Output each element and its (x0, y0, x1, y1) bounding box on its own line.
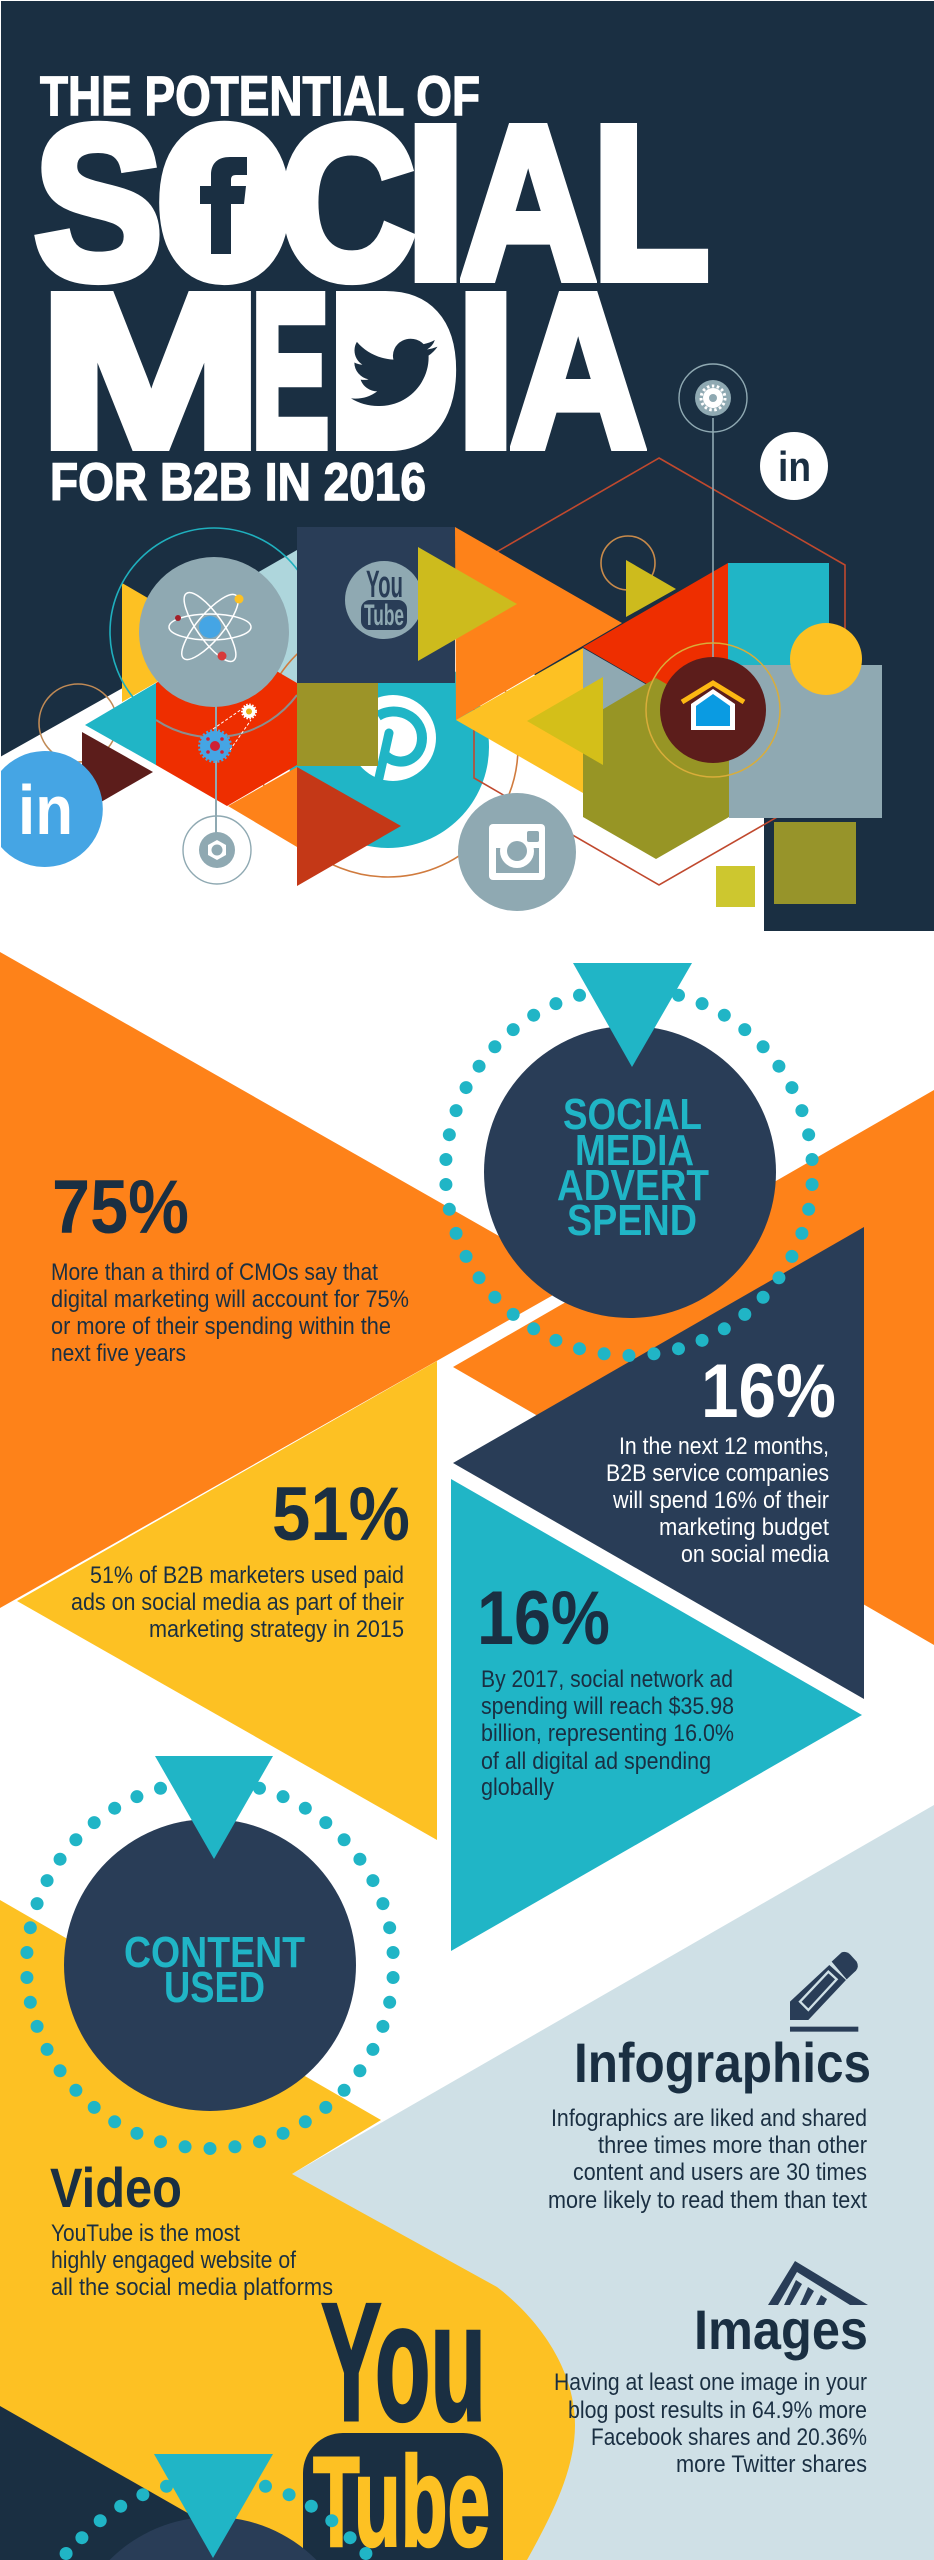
stat: 51%: ads on social media as part of their (71, 1589, 404, 1616)
stat: 51%: 51% (272, 1472, 410, 1557)
lime square (716, 866, 755, 907)
stat: 51% (71, 1472, 410, 1643)
badge: social media advert spend: MEDIA (575, 1126, 694, 1175)
title: social media: S (34, 82, 162, 324)
header dark background (1, 1, 934, 931)
icon: youtube badge (345, 561, 423, 639)
gray rectangle (729, 665, 882, 818)
text block: video (50, 2156, 333, 2301)
navy square (297, 527, 455, 683)
stat: 16% navy panel: on social media (681, 1541, 830, 1568)
text block: images: Facebook shares and 20.36% (591, 2424, 867, 2451)
stat: 51%: 51% of B2B marketers used paid (90, 1562, 404, 1589)
stat: 16% teal panel: billion, representing 16.0% (481, 1720, 734, 1747)
text block: images: Images (694, 2298, 868, 2361)
stat: 16% navy panel: marketing budget (659, 1514, 829, 1541)
text block: images: Having at least one image in your (554, 2369, 867, 2396)
teal left triangle (85, 683, 156, 765)
badge: content used (26, 1756, 394, 2148)
olive square (297, 683, 378, 766)
icon: youtube badge: You (366, 564, 403, 606)
stat: 75%: More than a third of CMOs say that (51, 1259, 378, 1286)
badge: content used: CONTENT (124, 1928, 305, 1977)
logo: large youtube: You (321, 2268, 486, 2456)
white wedge under the illustration (0, 590, 764, 932)
text block: images: blog post results in 64.9% more (568, 2397, 867, 2424)
stat: 16% teal panel: globally (481, 1774, 554, 1801)
text block: video: Video (50, 2156, 182, 2219)
stat: 16% teal panel: spending will reach $35.98 (481, 1693, 734, 1720)
icon: youtube badge: Tube (364, 599, 404, 632)
icon: blue linkedin badge: in (18, 771, 73, 849)
connector line to lower target (215, 706, 217, 833)
stat: 16% teal panel: 16% (477, 1576, 610, 1661)
icon: blue linkedin badge (1, 751, 103, 867)
title: social media: I (405, 82, 466, 324)
icon: twitter bird in the D (350, 322, 437, 422)
illustration: geometric social icon cluster (1, 364, 882, 911)
icon: white linkedin badge (760, 432, 828, 500)
badge: social media advert spend: SPEND (567, 1196, 697, 1245)
orange ring around pinterest (258, 617, 518, 877)
panel: yellow triangle (17, 1361, 437, 1840)
panel: yellow video shape (0, 1900, 575, 2560)
badge: social media advert spend: SOCIAL (563, 1090, 702, 1139)
hexagon outline (474, 458, 845, 885)
title: social media: I (456, 250, 516, 492)
text block: infographics: more likely to read them than text (548, 2187, 867, 2214)
title: social media: A (460, 82, 597, 324)
connector line to top gear (712, 418, 714, 660)
text block: infographics: Infographics are liked and shared (551, 2105, 867, 2132)
text block: infographics: three times more than other (598, 2132, 867, 2159)
text block: video: highly engaged website of (51, 2247, 296, 2274)
stat: 16% navy panel: B2B service companies (606, 1460, 829, 1487)
red hexagon (156, 642, 297, 806)
yellow circle (790, 623, 862, 695)
gold triangle (456, 648, 583, 793)
text block: video: YouTube is the most (51, 2220, 240, 2247)
orange big triangle (455, 527, 622, 720)
logo: large youtube (303, 2268, 503, 2560)
stat: 75%: next five years (51, 1340, 186, 1367)
teal ring around atom (110, 528, 318, 736)
icon: instagram badge (458, 793, 576, 911)
title: social media (34, 82, 710, 492)
mustard triangle (418, 547, 517, 661)
text block: images (554, 2298, 868, 2478)
icon: facebook f in the O (180, 145, 270, 265)
orange lower triangle (228, 767, 297, 847)
stat: 16% teal panel: By 2017, social network ad (481, 1666, 733, 1693)
light blue triangle (180, 550, 297, 683)
stat: 16% navy panel: 16% (701, 1349, 836, 1434)
text block: infographics: content and users are 30 times (573, 2159, 867, 2186)
title: social media: C (279, 82, 415, 324)
panel: dark bottom-left corner (0, 2406, 270, 2560)
badge: social media advert spend (446, 963, 812, 1356)
panel: light blue content area (292, 1805, 934, 2560)
stat: 75%: or more of their spending within the (51, 1313, 391, 1340)
panel: navy triangle (453, 1227, 864, 1699)
gray parallelogram (583, 648, 668, 721)
icon: white linkedin badge: in (778, 443, 811, 490)
stat: 16% navy panel (606, 1349, 836, 1568)
orange outline circle left (39, 684, 117, 762)
stat: 75%: digital marketing will account for 75% (51, 1286, 409, 1313)
rust triangle (297, 767, 401, 886)
panel: right orange shape (453, 1090, 934, 1645)
icon: image mountain (768, 2261, 868, 2305)
title: social media: L (592, 82, 710, 324)
text block: infographics (548, 2031, 871, 2214)
title line: for b2b in 2016: FOR B2B IN 2016 (50, 453, 426, 512)
icon: atom badge (139, 557, 289, 707)
badge: next section, cropped (60, 2454, 372, 2560)
small mustard triangle (626, 560, 676, 617)
yellow triangle behind atom (122, 583, 225, 702)
panel: left orange triangle (0, 952, 578, 1608)
stat: 51%: marketing strategy in 2015 (149, 1616, 404, 1643)
text block: images: more Twitter shares (676, 2451, 867, 2478)
teal square (728, 563, 829, 667)
stat: 16% navy panel: will spend 16% of their (612, 1487, 829, 1514)
icon: pencil (790, 1952, 858, 2032)
olive hexagon (583, 678, 729, 859)
panel: teal triangle (451, 1479, 862, 1951)
icon: pinterest teal disc (287, 646, 489, 848)
badge: content used: USED (164, 1963, 265, 2012)
stat: 16% teal panel: of all digital ad spending (481, 1748, 711, 1775)
red triangle (583, 563, 728, 731)
stat: 75% (51, 1165, 409, 1367)
icon: blue cog (200, 709, 251, 762)
icon: lower target (183, 816, 251, 884)
text block: video: all the social media platforms (51, 2274, 333, 2301)
title: social media: D (328, 250, 459, 492)
dark red triangle (82, 732, 153, 813)
title: social media: M (39, 250, 262, 492)
title: social media: A (510, 250, 647, 492)
badge: social media advert spend: ADVERT (557, 1161, 709, 1210)
title: social media: O (156, 82, 293, 324)
mustard left triangle (527, 677, 603, 765)
icon: house badge (646, 643, 780, 777)
title line: the potential of: THE POTENTIAL OF (40, 64, 480, 127)
icon: top gear (679, 364, 747, 432)
olive square lower right (774, 822, 856, 904)
stat: 75%: 75% (52, 1165, 189, 1250)
stat: 16% navy panel: In the next 12 months, (619, 1433, 829, 1460)
text block: infographics: Infographics (574, 2031, 871, 2094)
stat: 16% teal panel (477, 1576, 734, 1801)
icon: small white cog (242, 704, 256, 718)
orange small ring (601, 536, 655, 590)
title: social media: E (251, 250, 329, 492)
gray orbit arc over red (156, 695, 297, 737)
